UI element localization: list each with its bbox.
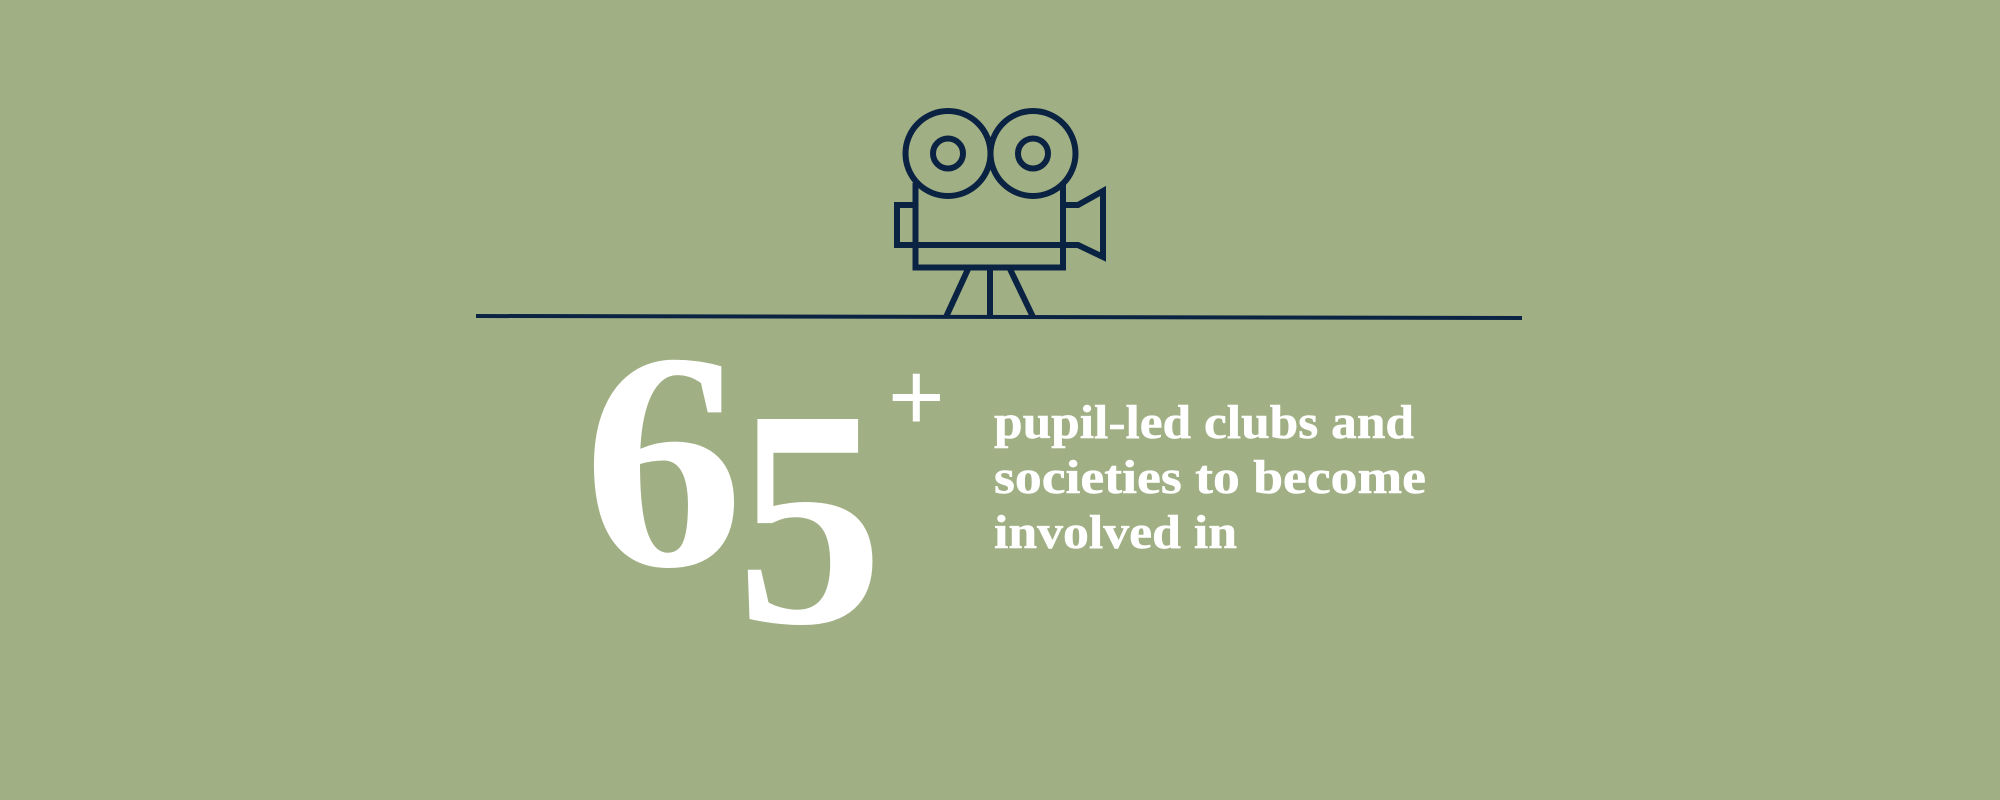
icon: film camera <box>897 111 1103 317</box>
big number: 65+: 6 <box>583 290 743 633</box>
big number: 65+: 5 <box>736 347 883 690</box>
description text: societies to become <box>994 451 1426 504</box>
description text: involved in <box>994 506 1237 559</box>
description text <box>994 396 1426 559</box>
baseline rule <box>476 316 1522 318</box>
big number: 65+: + <box>888 342 945 451</box>
description text: pupil-led clubs and <box>994 396 1414 449</box>
big number: 65+ <box>583 290 945 690</box>
